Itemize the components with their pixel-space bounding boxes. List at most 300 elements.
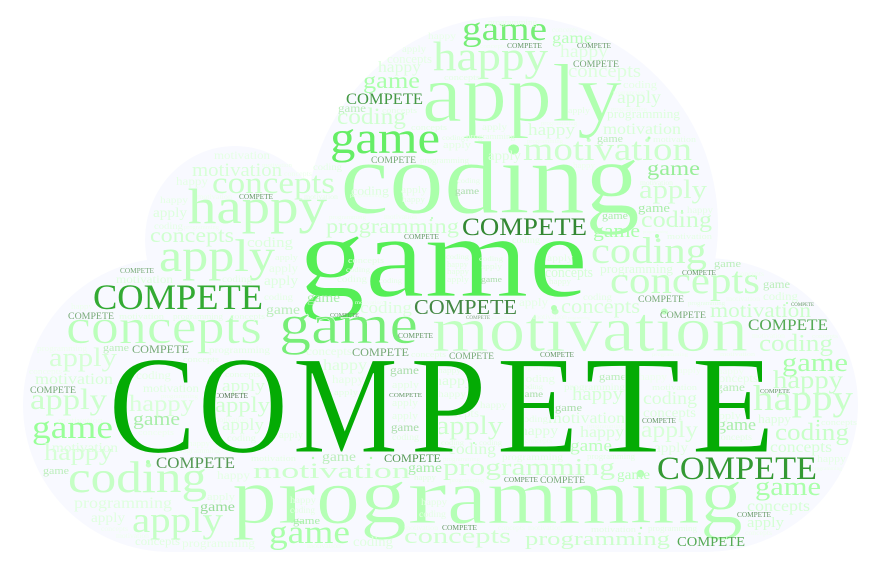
small words: happy xyxy=(447,259,469,269)
small words: concepts xyxy=(498,523,525,532)
medium words: game xyxy=(462,9,547,47)
small words: COMPETE xyxy=(748,315,828,334)
small words: motivation xyxy=(116,273,173,286)
small words: programming xyxy=(611,106,648,113)
small words: coding xyxy=(775,418,849,446)
small words: apply xyxy=(269,262,299,275)
small words: game xyxy=(338,102,366,115)
small words: happy xyxy=(414,472,437,482)
small words: happy xyxy=(639,372,667,383)
word: COMPETE main: O xyxy=(198,328,288,483)
small words: happy xyxy=(438,366,462,375)
small words: coding xyxy=(346,265,370,274)
word: programming large: m xyxy=(558,451,630,541)
small words: motivation xyxy=(143,382,199,395)
small words: concepts xyxy=(225,371,260,380)
word: concepts large: concepts xyxy=(66,300,262,354)
small words: happy xyxy=(717,367,745,377)
small words: game xyxy=(322,450,356,465)
small words: coding xyxy=(154,222,183,232)
word: COMPETE secondary left: COMPETE xyxy=(93,278,263,318)
small words: concepts xyxy=(821,419,857,428)
small words: programming xyxy=(600,262,673,276)
small words: game xyxy=(717,415,756,434)
small words: happy xyxy=(572,384,623,405)
small words: apply xyxy=(678,367,701,376)
small words: game xyxy=(455,187,479,197)
small words: coding xyxy=(313,163,342,173)
small words: concepts xyxy=(812,333,838,340)
small words: motivation xyxy=(752,331,785,340)
small words: programming xyxy=(184,225,219,231)
small words: concepts xyxy=(434,407,479,420)
small words: programming xyxy=(613,90,645,96)
small words: motivation xyxy=(384,212,417,221)
small words: game xyxy=(266,303,300,318)
small words: COMPETE xyxy=(540,350,575,359)
medium words: motivation xyxy=(35,370,114,388)
word: programming large: r xyxy=(407,451,447,541)
small words: concepts xyxy=(545,265,593,281)
small words: programming xyxy=(37,343,88,353)
medium words: game xyxy=(269,514,350,550)
small words: apply xyxy=(153,206,187,221)
small words: game xyxy=(519,390,544,400)
word: programming large: m xyxy=(487,451,558,541)
small words: game xyxy=(599,371,626,383)
small words: happy xyxy=(188,438,211,448)
small words: apply xyxy=(207,492,235,503)
small words: COMPETE xyxy=(760,388,790,395)
small words: coding xyxy=(247,235,293,251)
small words: programming xyxy=(525,529,670,550)
small words: happy xyxy=(573,162,595,171)
small words: apply xyxy=(275,254,298,263)
small words: concepts xyxy=(525,436,552,445)
small words: game xyxy=(602,211,628,222)
small words: coding xyxy=(353,535,393,550)
small words: coding xyxy=(441,438,464,447)
small words: game xyxy=(390,364,419,377)
small words: happy xyxy=(560,42,609,62)
small words: happy xyxy=(817,454,846,465)
small words: apply xyxy=(713,411,741,422)
medium words: programming xyxy=(326,213,459,238)
small words: happy xyxy=(421,498,448,508)
small words: coding xyxy=(519,415,548,425)
small words: coding xyxy=(479,438,502,447)
medium words: apply xyxy=(222,415,264,434)
small words: game xyxy=(43,466,69,477)
small words: coding xyxy=(457,176,480,185)
small words: coding xyxy=(448,440,497,458)
small words: COMPETE xyxy=(330,312,359,319)
small words: motivation xyxy=(251,455,296,464)
small words: COMPETE xyxy=(132,343,189,356)
small words: apply xyxy=(654,441,688,456)
small words: happy xyxy=(520,424,558,439)
small words: game xyxy=(552,29,592,47)
small words: coding xyxy=(222,275,252,285)
medium words: happy xyxy=(129,391,195,417)
medium words: apply xyxy=(222,376,266,395)
small words: happy xyxy=(549,276,572,286)
medium words: motivation xyxy=(523,131,692,167)
small words: COMPETE xyxy=(677,534,745,550)
small words: motivation xyxy=(726,294,760,303)
small words: game xyxy=(103,343,129,354)
small words: coding xyxy=(419,510,446,520)
small words: motivation xyxy=(214,149,270,162)
small words: happy xyxy=(438,390,467,400)
small words: programming xyxy=(812,466,842,472)
small words: concepts xyxy=(404,524,511,549)
word: programming large: g xyxy=(700,451,743,541)
small words: concepts xyxy=(561,295,640,318)
small words: COMPETE xyxy=(346,89,423,108)
small words: game xyxy=(293,516,320,527)
small words: apply xyxy=(482,123,508,133)
small words: game xyxy=(716,381,745,394)
word: motivation large: motivation xyxy=(432,294,748,365)
small words: happy xyxy=(480,401,508,411)
small words: motivation xyxy=(720,351,756,358)
small words: apply xyxy=(447,276,469,285)
small words: apply xyxy=(392,411,418,422)
word: programming large: g xyxy=(360,451,407,541)
small words: programming xyxy=(488,17,538,27)
small words: programming xyxy=(443,456,481,463)
small words: COMPETE xyxy=(577,41,612,50)
small words: happy xyxy=(160,196,189,206)
small words: coding xyxy=(763,290,798,303)
small words: coding xyxy=(337,104,406,130)
small words: programming xyxy=(466,131,516,141)
small words: programming xyxy=(176,446,220,455)
small words: concepts xyxy=(101,524,128,533)
small words: happy xyxy=(758,412,791,426)
medium words: apply xyxy=(159,230,276,281)
small words: concepts xyxy=(411,351,446,360)
small words: COMPETE xyxy=(507,41,542,50)
word: programming large: a xyxy=(447,451,487,541)
small words: concepts xyxy=(230,313,265,322)
small words: COMPETE xyxy=(791,303,814,308)
small words: motivation xyxy=(528,523,562,532)
small words: motivation xyxy=(548,409,626,427)
small words: motivation xyxy=(355,300,383,306)
small words: COMPETE xyxy=(352,346,409,359)
word: COMPETE lower right: COMPETE xyxy=(657,451,817,487)
small words: coding xyxy=(290,506,315,516)
small words: programming xyxy=(568,316,591,321)
small words: coding xyxy=(442,133,465,142)
medium words: apply xyxy=(30,382,107,415)
small words: COMPETE xyxy=(682,268,716,277)
small words: happy xyxy=(378,58,422,76)
small words: COMPETE xyxy=(642,416,677,425)
word: programming large: r xyxy=(277,451,316,541)
small words: happy xyxy=(71,301,94,311)
small words: happy xyxy=(290,496,317,506)
small words: motivation xyxy=(116,531,149,540)
small words: coding xyxy=(337,275,367,285)
small words: apply xyxy=(91,511,125,526)
small words: apply xyxy=(547,254,574,264)
small words: concepts xyxy=(713,372,758,385)
small words: motivation xyxy=(404,523,438,532)
word: game largest secondary: game xyxy=(298,192,588,322)
small words: concepts xyxy=(138,429,174,438)
small words: game xyxy=(593,221,640,242)
small words: concepts xyxy=(747,497,810,515)
small words: programming xyxy=(564,383,625,393)
small words: COMPETE xyxy=(573,59,619,70)
small words: COMPETE xyxy=(449,351,494,362)
small words: programming xyxy=(587,451,636,461)
small words: programming xyxy=(209,346,270,356)
small words: coding xyxy=(623,79,657,91)
small words: COMPETE xyxy=(371,155,416,166)
small words: COMPETE xyxy=(540,475,585,486)
small words: coding xyxy=(512,236,540,246)
small words: apply xyxy=(264,274,298,289)
small words: programming xyxy=(541,121,577,127)
small words: apply xyxy=(443,139,471,151)
small words: COMPETE xyxy=(30,385,76,396)
small words: coding xyxy=(264,293,293,303)
small words: concepts xyxy=(348,257,384,266)
small words: programming xyxy=(648,523,698,533)
small words: COMPETE xyxy=(120,266,155,275)
small words: concepts xyxy=(552,25,578,34)
small words: programming xyxy=(652,352,688,358)
small words: happy xyxy=(402,195,426,204)
small words: coding xyxy=(379,276,402,285)
small words: programming xyxy=(502,453,563,463)
small words: concepts xyxy=(444,74,480,83)
small words: motivation xyxy=(197,192,232,201)
small words: concepts xyxy=(29,366,62,376)
small words: COMPETE xyxy=(660,310,706,321)
small words: coding xyxy=(479,254,503,263)
word: programming large: p xyxy=(232,451,277,541)
small words: programming xyxy=(607,107,680,121)
small words: concepts xyxy=(770,438,832,456)
small words: programming xyxy=(587,423,625,430)
small words: game xyxy=(408,461,442,476)
medium words: concepts xyxy=(150,223,234,247)
small words: coding xyxy=(759,329,833,357)
small words: COMPETE xyxy=(68,311,114,322)
small words: concepts xyxy=(480,43,506,50)
small words: apply xyxy=(488,149,521,164)
medium words: motivation xyxy=(192,160,282,181)
small words: coding xyxy=(641,207,712,233)
word: coding large: coding xyxy=(340,122,640,236)
medium words: happy xyxy=(44,439,114,466)
small words: apply xyxy=(617,88,662,108)
small words: game xyxy=(597,134,623,145)
small words: apply xyxy=(401,185,427,196)
medium words: happy xyxy=(433,34,548,79)
small words: game xyxy=(755,473,821,502)
small words: COMPETE xyxy=(239,192,274,201)
small words: COMPETE xyxy=(504,475,539,484)
small words: coding xyxy=(520,382,543,391)
small words: happy xyxy=(528,120,575,139)
small words: game xyxy=(391,421,419,434)
small words: happy xyxy=(580,423,625,441)
small words: happy xyxy=(687,206,714,216)
dots xyxy=(146,109,819,529)
small words: game xyxy=(638,201,670,215)
small words: apply xyxy=(334,389,358,398)
medium words xyxy=(30,9,760,550)
medium words: apply xyxy=(436,412,504,441)
small words: happy xyxy=(753,379,854,419)
small words: happy xyxy=(176,175,209,188)
word: programming large: o xyxy=(316,451,360,541)
small words: concepts xyxy=(387,52,432,66)
small words: concepts xyxy=(284,169,312,178)
small words: concepts xyxy=(183,356,219,365)
word: COMPETE main: M xyxy=(293,328,398,483)
small words: concepts xyxy=(643,406,696,421)
small words: motivation xyxy=(533,312,567,321)
small words: motivation xyxy=(304,192,338,201)
small words: apply xyxy=(481,262,503,271)
small words: happy xyxy=(447,266,470,276)
small words: happy xyxy=(323,356,368,374)
small words: coding xyxy=(446,252,469,261)
medium words: game xyxy=(307,291,340,306)
small words: programming xyxy=(350,193,382,199)
small words: happy xyxy=(434,374,473,389)
small words: apply xyxy=(568,107,590,116)
medium words: programming xyxy=(443,454,615,481)
small words: game xyxy=(200,500,235,515)
small words: COMPETE xyxy=(442,523,478,532)
medium words: concepts xyxy=(212,167,335,201)
small words: game xyxy=(555,403,582,414)
medium words: apply xyxy=(132,501,224,541)
small words: apply xyxy=(279,430,303,441)
small words: COMPETE xyxy=(638,294,684,305)
small words: programming xyxy=(519,366,553,372)
small words: concepts xyxy=(745,528,772,537)
small words: apply xyxy=(392,398,418,409)
word: COMPETE main: T xyxy=(584,328,681,483)
small words: apply xyxy=(402,45,427,55)
small words: apply xyxy=(641,417,699,443)
small words: coding xyxy=(643,389,698,409)
medium words: coding xyxy=(68,453,207,502)
small words: motivation xyxy=(119,313,164,322)
word: COMPETE main: C xyxy=(108,328,197,483)
word: programming large: i xyxy=(630,451,652,541)
small words: motivation xyxy=(603,120,682,138)
small words: programming xyxy=(173,311,224,321)
small words: concepts xyxy=(411,124,447,133)
medium words: game xyxy=(133,409,180,430)
small words: motivation xyxy=(262,162,293,169)
small words: COMPETE xyxy=(398,331,434,340)
medium words: coding xyxy=(591,230,707,271)
small words: programming xyxy=(74,494,173,512)
medium words: game xyxy=(32,409,113,445)
small words: happy xyxy=(428,32,457,42)
small words: COMPETE xyxy=(737,510,772,519)
small words: game xyxy=(763,278,790,291)
small words: concepts xyxy=(568,61,641,82)
word: game secondary: game xyxy=(279,294,418,356)
small words: game xyxy=(363,68,420,94)
medium words: happy xyxy=(188,180,328,234)
small words: COMPETE xyxy=(214,391,249,400)
small words: COMPETE xyxy=(156,453,235,472)
small words: apply xyxy=(639,176,708,205)
small words: concepts xyxy=(382,107,417,116)
small words: programming xyxy=(182,537,255,550)
small words: programming xyxy=(688,300,726,307)
small words: happy xyxy=(217,469,251,482)
small words: apply xyxy=(519,296,549,309)
small words: game xyxy=(481,276,502,285)
small words: programming xyxy=(527,138,564,145)
small words: motivation xyxy=(652,384,697,393)
word: COMPETE main: E xyxy=(496,328,579,483)
small words: motivation xyxy=(710,299,811,322)
small words: motivation xyxy=(58,417,103,426)
word: COMPETE main: E xyxy=(691,328,775,483)
small words: happy xyxy=(332,373,365,386)
small words: coding xyxy=(583,293,612,303)
small words: game xyxy=(647,156,700,180)
small words: COMPETE xyxy=(389,392,422,399)
medium words: apply xyxy=(49,344,118,373)
small words: game xyxy=(714,258,741,270)
small words: concepts xyxy=(306,345,352,358)
small words: COMPETE xyxy=(404,232,440,241)
word: programming large xyxy=(232,451,743,541)
word: COMPETE main: P xyxy=(410,328,487,483)
small words: apply xyxy=(747,515,784,531)
small words: programming xyxy=(329,214,367,221)
small words: programming xyxy=(643,230,669,235)
word: COMPETE centre: COMPETE xyxy=(414,295,517,319)
small words: COMPETE xyxy=(384,452,441,465)
medium words: game xyxy=(330,112,440,163)
small words: coding xyxy=(520,374,555,385)
small words: happy xyxy=(773,366,843,394)
word: apply large: apply xyxy=(422,48,622,140)
small words: COMPETE xyxy=(466,316,490,321)
small words: coding xyxy=(392,433,419,443)
small words: apply xyxy=(392,380,419,391)
small words: programming xyxy=(420,155,470,165)
small words: concepts xyxy=(135,535,180,548)
small words: coding xyxy=(360,298,412,317)
small words: concepts xyxy=(492,315,513,321)
small words: concepts xyxy=(716,433,752,443)
word: COMPETE main xyxy=(108,328,775,483)
medium words: motivation xyxy=(253,459,410,484)
word: COMPETE upper centre: COMPETE xyxy=(462,213,587,241)
word: programming large: n xyxy=(652,451,700,541)
small words: motivation xyxy=(52,441,118,456)
small words: coding xyxy=(351,184,389,198)
